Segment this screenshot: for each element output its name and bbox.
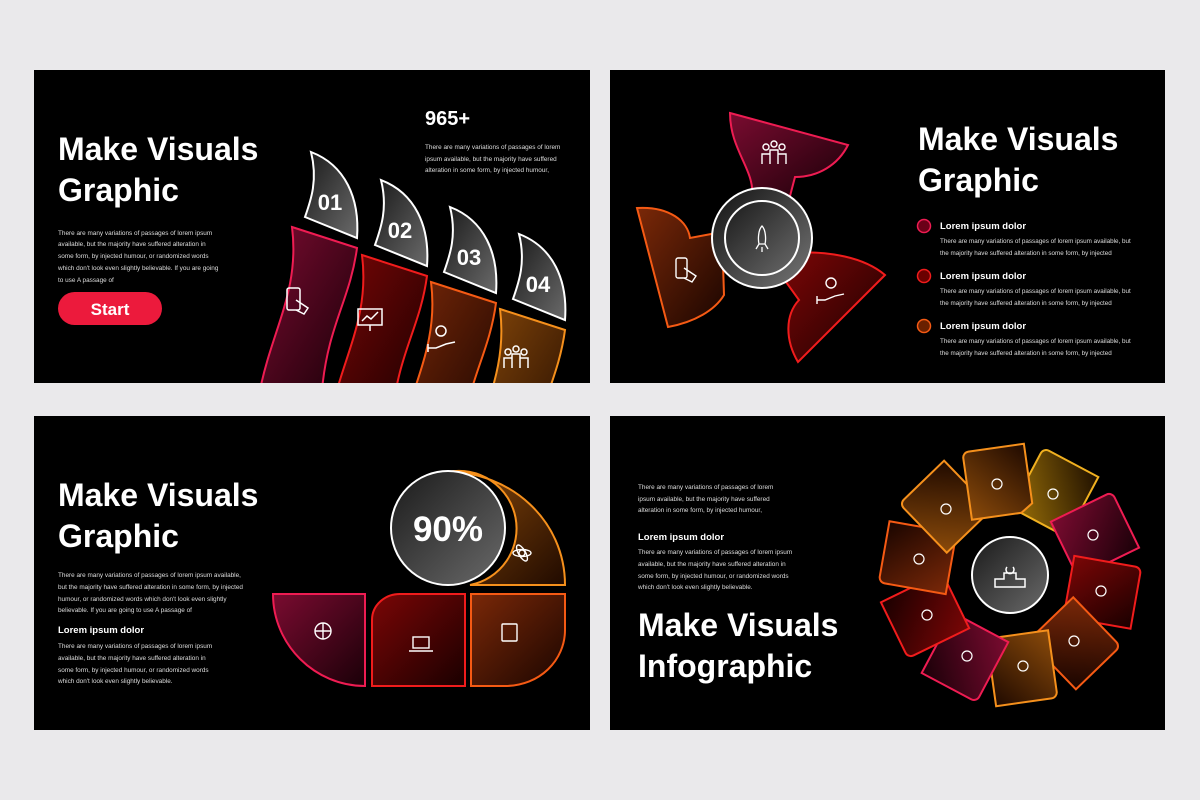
sub text: There are many variations of passages of lorem ipsum — [638, 549, 792, 556]
title: Make Visuals — [638, 607, 838, 643]
body text: alteration in some form, by injected humour, — [638, 507, 762, 514]
list item 3 — [918, 320, 1131, 357]
center circle — [712, 188, 812, 288]
center circle — [972, 537, 1048, 613]
title: Infographic — [638, 648, 812, 684]
start button — [58, 292, 162, 325]
sub text: which don't look even slightly believable. — [57, 678, 173, 685]
start button: Start — [91, 300, 130, 319]
list item 2 — [918, 270, 1131, 307]
body text: There are many variations of passages of lorem ipsum available, — [58, 572, 241, 579]
stat 965+: 965+ — [425, 108, 470, 130]
circle 90% — [391, 471, 505, 585]
title: Make Visuals — [918, 121, 1118, 157]
steps chart: 04 — [526, 272, 551, 297]
list item 3: Lorem ipsum dolor — [940, 321, 1026, 332]
body text: but the majority have suffered alteration in some form, by injected — [58, 584, 243, 591]
list item 1 — [918, 220, 1131, 257]
list item 1: There are many variations of passages of lorem ipsum available, but — [940, 238, 1131, 245]
list item 3: There are many variations of passages of lorem ipsum available, but — [940, 338, 1131, 345]
icons — [676, 141, 844, 304]
panel: top-right — [610, 70, 1165, 383]
title: Graphic — [58, 518, 179, 554]
subheading: Lorem ipsum dolor — [638, 532, 724, 543]
steps chart — [260, 150, 566, 383]
body text: There are many variations of passages of lorem ipsum — [58, 230, 212, 237]
sub text: some form, by injected humour, or randomized words — [58, 667, 209, 674]
stat text: ipsum available, but the majority have suffered — [425, 156, 557, 163]
title: Graphic — [918, 162, 1039, 198]
stat text: There are many variations of passages of lorem — [425, 144, 560, 151]
list item 2: There are many variations of passages of lorem ipsum available, but — [940, 288, 1131, 295]
panel: bottom-left — [34, 416, 590, 730]
body text: available, but the majority have suffered alteration in — [58, 241, 206, 248]
box: book — [471, 594, 565, 686]
steps chart: 01 — [318, 190, 342, 215]
list item 2: Lorem ipsum dolor — [940, 271, 1026, 282]
box: laptop — [372, 594, 465, 686]
title: Graphic — [58, 172, 179, 208]
wheel icons — [914, 479, 1106, 671]
blade: left — [637, 208, 724, 327]
stat text: alteration in some form, by injected humour, — [425, 167, 549, 174]
blade: top — [730, 113, 848, 196]
blade: right — [786, 252, 885, 362]
icons — [315, 543, 531, 651]
box: globe — [273, 594, 365, 686]
list item 3: the majority have suffered alteration in some form, by injected — [940, 350, 1112, 357]
body text: some form, by injected humour, or randomized words — [58, 253, 209, 260]
sub text: which don't look even slightly believable. — [637, 584, 753, 591]
orange quarter shape — [448, 471, 565, 585]
title: Make Visuals — [58, 477, 258, 513]
list item 2: the majority have suffered alteration in some form, by injected — [940, 300, 1112, 307]
panel: bottom-right — [610, 416, 1165, 730]
sub text: available, but the majority have suffered alteration in — [58, 655, 206, 662]
list item 1: Lorem ipsum dolor — [940, 221, 1026, 232]
panel: top-left — [34, 70, 590, 383]
circle 90%: 90% — [413, 510, 483, 549]
body text: believable. If you are going to use A passage of — [58, 607, 192, 614]
body text: ipsum available, but the majority have suffered — [638, 496, 770, 503]
body text: to use A passage of — [58, 277, 114, 284]
body text: which don't look even slightly believable. If you are going — [57, 265, 219, 272]
steps chart: 03 — [457, 245, 481, 270]
body text: humour, or randomized words which don't look even slightly — [58, 596, 227, 603]
sub text: There are many variations of passages of lorem ipsum — [58, 643, 212, 650]
steps chart: 02 — [388, 218, 412, 243]
sub text: available, but the majority have suffered alteration in — [638, 561, 786, 568]
title: Make Visuals — [58, 131, 258, 167]
wheel — [879, 444, 1141, 706]
list item 1: the majority have suffered alteration in some form, by injected — [940, 250, 1112, 257]
subheading: Lorem ipsum dolor — [58, 625, 144, 636]
body text: There are many variations of passages of lorem — [638, 484, 773, 491]
sub text: some form, by injected humour, or randomized words — [638, 573, 789, 580]
